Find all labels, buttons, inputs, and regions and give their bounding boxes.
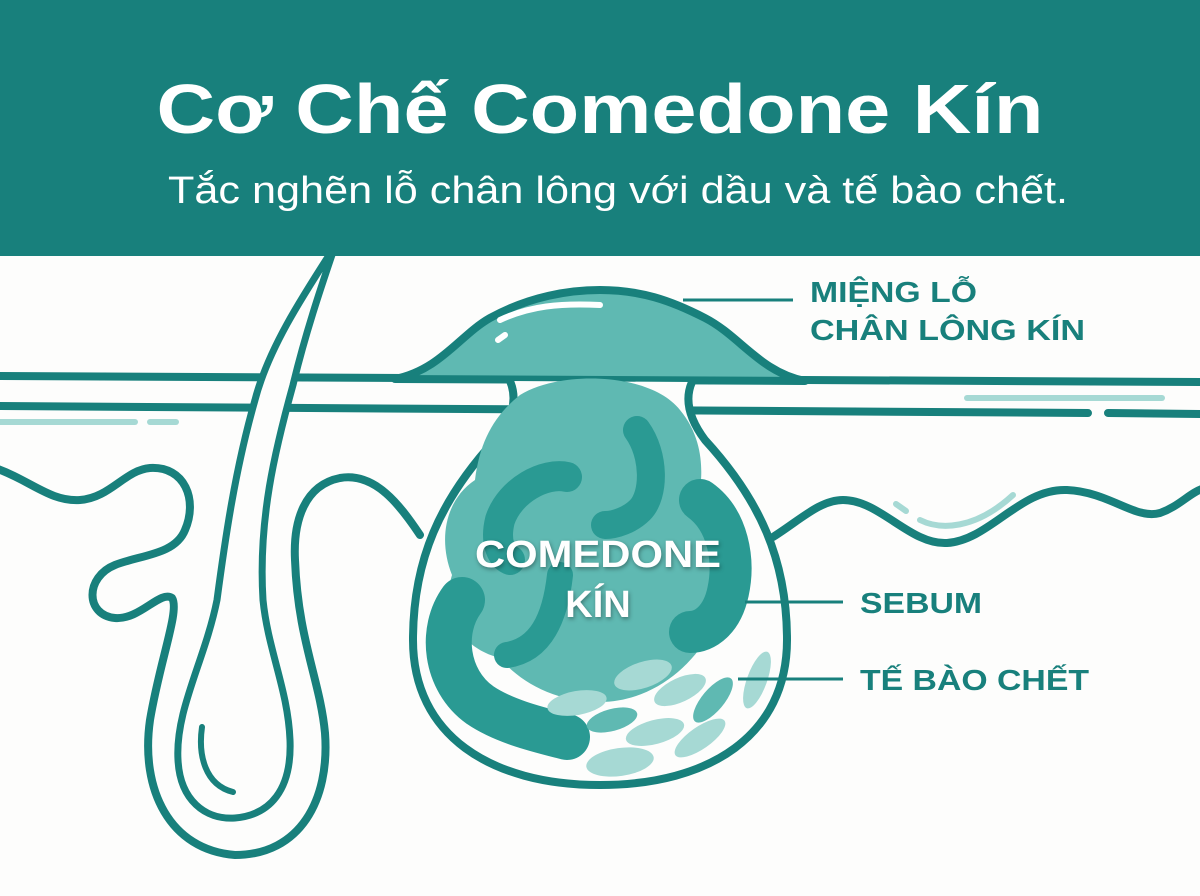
center label: KÍN <box>565 582 631 626</box>
subtitle: Tắc nghẽn lỗ chân lông với dầu và tế bào chết. <box>168 169 1068 212</box>
label: sebum: SEBUM <box>860 588 982 620</box>
epidermis lines <box>0 376 1200 422</box>
label: closed pore opening: MIỆNG LỖ <box>810 275 977 309</box>
dome: closed pore opening <box>395 290 805 381</box>
sebum mass <box>445 378 736 737</box>
center label <box>475 534 721 626</box>
follicle sac <box>413 381 787 785</box>
header banner <box>0 0 1200 256</box>
skin diagram <box>0 376 1200 855</box>
center label: COMEDONE <box>475 534 721 576</box>
hair follicle <box>178 246 335 818</box>
label: closed pore opening <box>683 275 1085 347</box>
label: dead skin cells: TẾ BÀO CHẾT <box>860 663 1089 697</box>
dermis wave with sebaceous gland <box>0 468 420 855</box>
title: Cơ Chế Comedone Kín <box>156 70 1044 148</box>
comedone <box>395 290 805 785</box>
dead skin cells <box>545 648 777 781</box>
label: closed pore opening: CHÂN LÔNG KÍN <box>810 313 1085 347</box>
